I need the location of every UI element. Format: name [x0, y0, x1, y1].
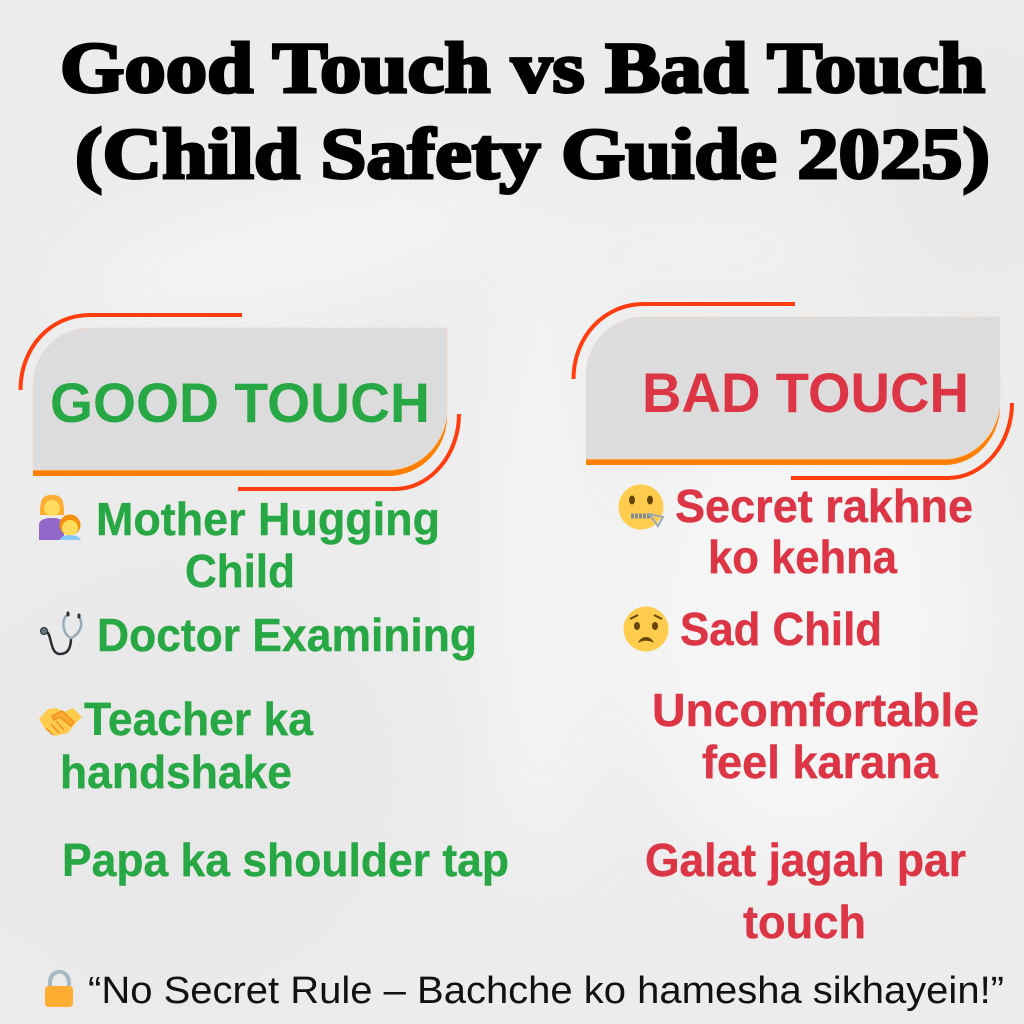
item: secret rakhne ko kehna: [675, 480, 973, 583]
icon: stethoscope: [40, 613, 81, 654]
item: galat jagah par touch: [645, 834, 966, 948]
icon: sad face: [624, 606, 668, 652]
item: secret rakhne ko kehna: ko kehna: [708, 531, 897, 583]
title: Good Touch vs Bad Touch: [60, 28, 985, 108]
item: papa ka shoulder tap: Papa ka shoulder tap: [62, 834, 509, 886]
item: galat jagah par touch: Galat jagah par: [645, 834, 966, 886]
item: teacher ka handshake: Teacher ka: [84, 693, 313, 745]
heading text: BAD TOUCH: [642, 361, 969, 424]
icon: padlock: [45, 972, 73, 1007]
item: doctor examining: Doctor Examining: [97, 609, 477, 661]
footer rule text: “No Secret Rule – Bachche ko hamesha sikhayein!”: [88, 970, 1004, 1012]
title: [60, 28, 990, 194]
item: mother hugging child: Mother Hugging: [96, 493, 440, 545]
title: (Child Safety Guide 2025): [75, 114, 990, 194]
red corner arc bottom: [238, 414, 459, 489]
item: secret rakhne ko kehna: Secret rakhne: [675, 480, 973, 532]
red corner arc bottom: [791, 403, 1012, 478]
item: uncomfortable feel karana: feel karana: [702, 736, 938, 788]
item: mother hugging child: [96, 493, 440, 597]
orange underline: [33, 410, 447, 476]
item: teacher ka handshake: [60, 693, 313, 798]
orange underline: [586, 400, 1000, 465]
panel: good touch heading: [20, 315, 459, 489]
heading text: GOOD TOUCH: [50, 371, 430, 434]
red corner arc top: [20, 315, 242, 390]
item: sad child: Sad Child: [680, 603, 882, 655]
icon: mother and child: [39, 495, 81, 540]
item: uncomfortable feel karana: [652, 684, 979, 788]
icon: handshake: [39, 708, 82, 736]
item: teacher ka handshake: handshake: [60, 746, 292, 798]
item: galat jagah par touch: touch: [743, 896, 866, 948]
panel: bad touch heading: [574, 304, 1012, 478]
icon: zipper mouth face: [618, 484, 664, 530]
item: mother hugging child: Child: [185, 545, 295, 597]
red corner arc top: [574, 304, 795, 379]
item: uncomfortable feel karana: Uncomfortable: [652, 684, 979, 736]
